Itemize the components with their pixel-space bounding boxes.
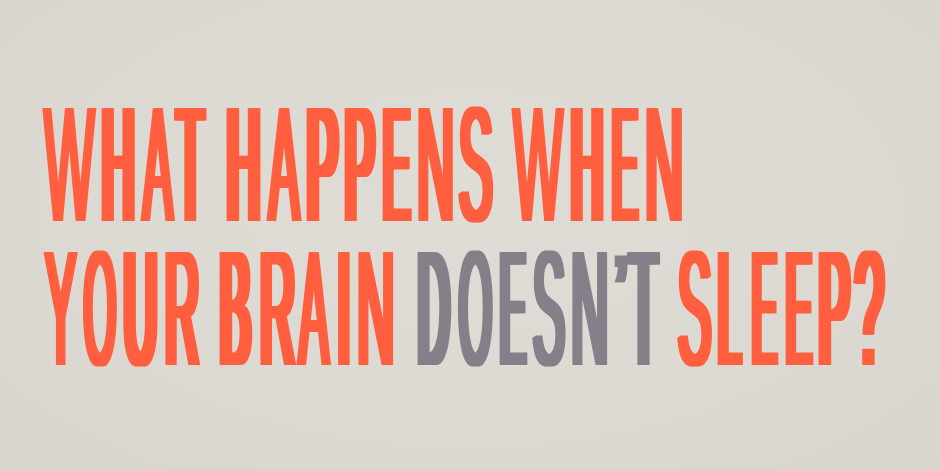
title line 2: your brain doesn't sleep: B [220,217,251,400]
title line 1: what happens when: S [459,73,492,256]
title line 1: what happens when: H [571,73,603,256]
title line 1: what happens when: H [227,73,260,256]
title line 1: what happens when: H [102,73,135,256]
title line 2: your brain doesn't sleep: T [630,217,657,400]
title line 1: what happens when: P [345,73,375,256]
title line 2: your brain doesn't sleep: L [718,217,741,400]
title line 2: your brain doesn't sleep: ? [855,217,884,400]
title line 1: what happens when: N [417,73,454,256]
title line 2: your brain doesn't sleep: N [571,217,608,400]
title line 2: your brain doesn't sleep: S [532,217,564,400]
title line 2: your brain doesn't sleep: O [459,217,492,400]
title line 2: your brain doesn't sleep: ’ [613,230,629,364]
title line 2: your brain doesn't sleep: R [165,217,199,400]
title line 2: your brain doesn't sleep: N [357,217,394,400]
title line 2: your brain doesn't sleep: U [124,217,156,400]
title line 2: your brain doesn't sleep [44,217,886,400]
title line 2: your brain doesn't sleep: I [338,217,349,400]
title line 1: what happens when: P [307,73,338,256]
title line 2: your brain doesn't sleep: D [418,217,450,400]
title line 2: your brain doesn't sleep: R [260,217,295,400]
title line 2: your brain doesn't sleep: E [786,217,812,400]
title line 2: your brain doesn't sleep: P [819,217,850,400]
title line 2: your brain doesn't sleep: O [84,217,116,400]
title line 2: your brain doesn't sleep: Y [45,217,77,400]
title line 2: your brain doesn't sleep: E [752,217,777,400]
title line 1: what happens when: E [612,73,638,256]
title line 1: what happens when: E [383,73,410,256]
title line 1: what happens when [42,73,882,367]
title line 1: what happens when: W [44,73,95,256]
title line 1: what happens when: W [513,73,563,256]
title line 1: what happens when: A [143,73,172,256]
title line 2: your brain doesn't sleep: E [500,217,526,400]
title line 1: what happens when: N [645,73,683,256]
title line 1: what happens when: A [269,73,299,256]
title line 2: your brain doesn't sleep: S [678,217,711,400]
title [42,73,886,400]
title line 1: what happens when: T [177,73,204,256]
title line 2: your brain doesn't sleep: A [299,217,329,400]
